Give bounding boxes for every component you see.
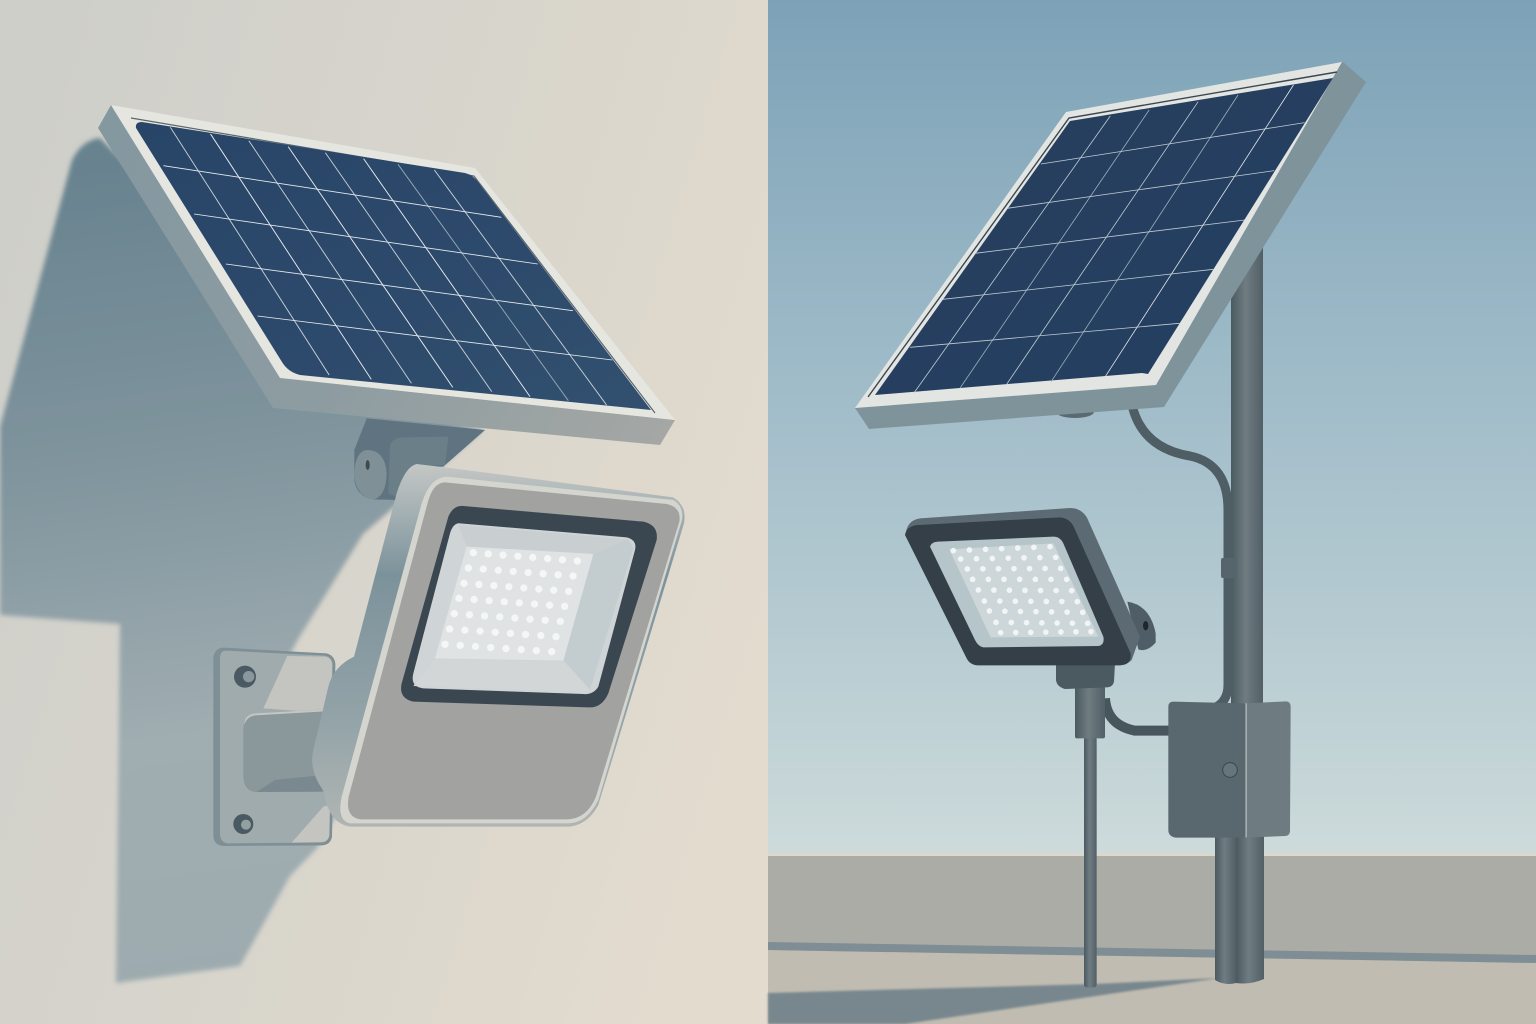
wall mounting plate <box>213 648 335 846</box>
panel cell grid <box>910 85 1305 393</box>
light stem <box>1056 663 1115 987</box>
panel frame <box>855 62 1342 408</box>
mounting arm block <box>243 709 325 792</box>
panel side edge <box>855 62 1366 429</box>
lower conduit <box>1105 698 1170 731</box>
housing side and rim <box>312 464 685 827</box>
lens <box>413 523 635 694</box>
panel: wall-mounted solar flood light <box>0 0 768 1024</box>
power cable from panel to box <box>1132 405 1237 708</box>
LED dot array <box>953 547 1092 633</box>
panel: pole-mounted solar flood light <box>768 0 1536 1024</box>
parapet wall <box>768 853 1536 964</box>
cast shadow on wall <box>0 138 483 983</box>
lens <box>930 537 1104 647</box>
dark bezel <box>401 506 657 707</box>
junction box <box>1168 701 1291 838</box>
upper bracket <box>354 418 485 500</box>
frame inner groove <box>868 72 1337 397</box>
flood light, pole <box>905 508 1170 987</box>
front plate <box>348 482 680 819</box>
panel side edge <box>98 105 675 445</box>
knuckle joint <box>1127 602 1156 650</box>
panel frame <box>111 105 675 420</box>
dark front frame <box>905 517 1131 665</box>
sky background <box>768 0 1536 860</box>
support pole <box>1215 240 1264 984</box>
wall background <box>0 0 768 1024</box>
LED dot array <box>445 553 579 652</box>
housing back <box>906 508 1140 665</box>
solar panel, pole <box>855 62 1366 429</box>
frame inner groove <box>131 118 655 413</box>
flood light housing <box>312 464 685 827</box>
solar panel, wall <box>98 105 675 445</box>
bolts <box>233 666 256 834</box>
panel hub <box>1056 406 1094 418</box>
panel glass <box>875 78 1333 395</box>
box button <box>1223 763 1237 777</box>
panel cell grid <box>163 127 612 405</box>
panel glass <box>136 122 651 410</box>
rooftop ground <box>768 942 1536 1024</box>
